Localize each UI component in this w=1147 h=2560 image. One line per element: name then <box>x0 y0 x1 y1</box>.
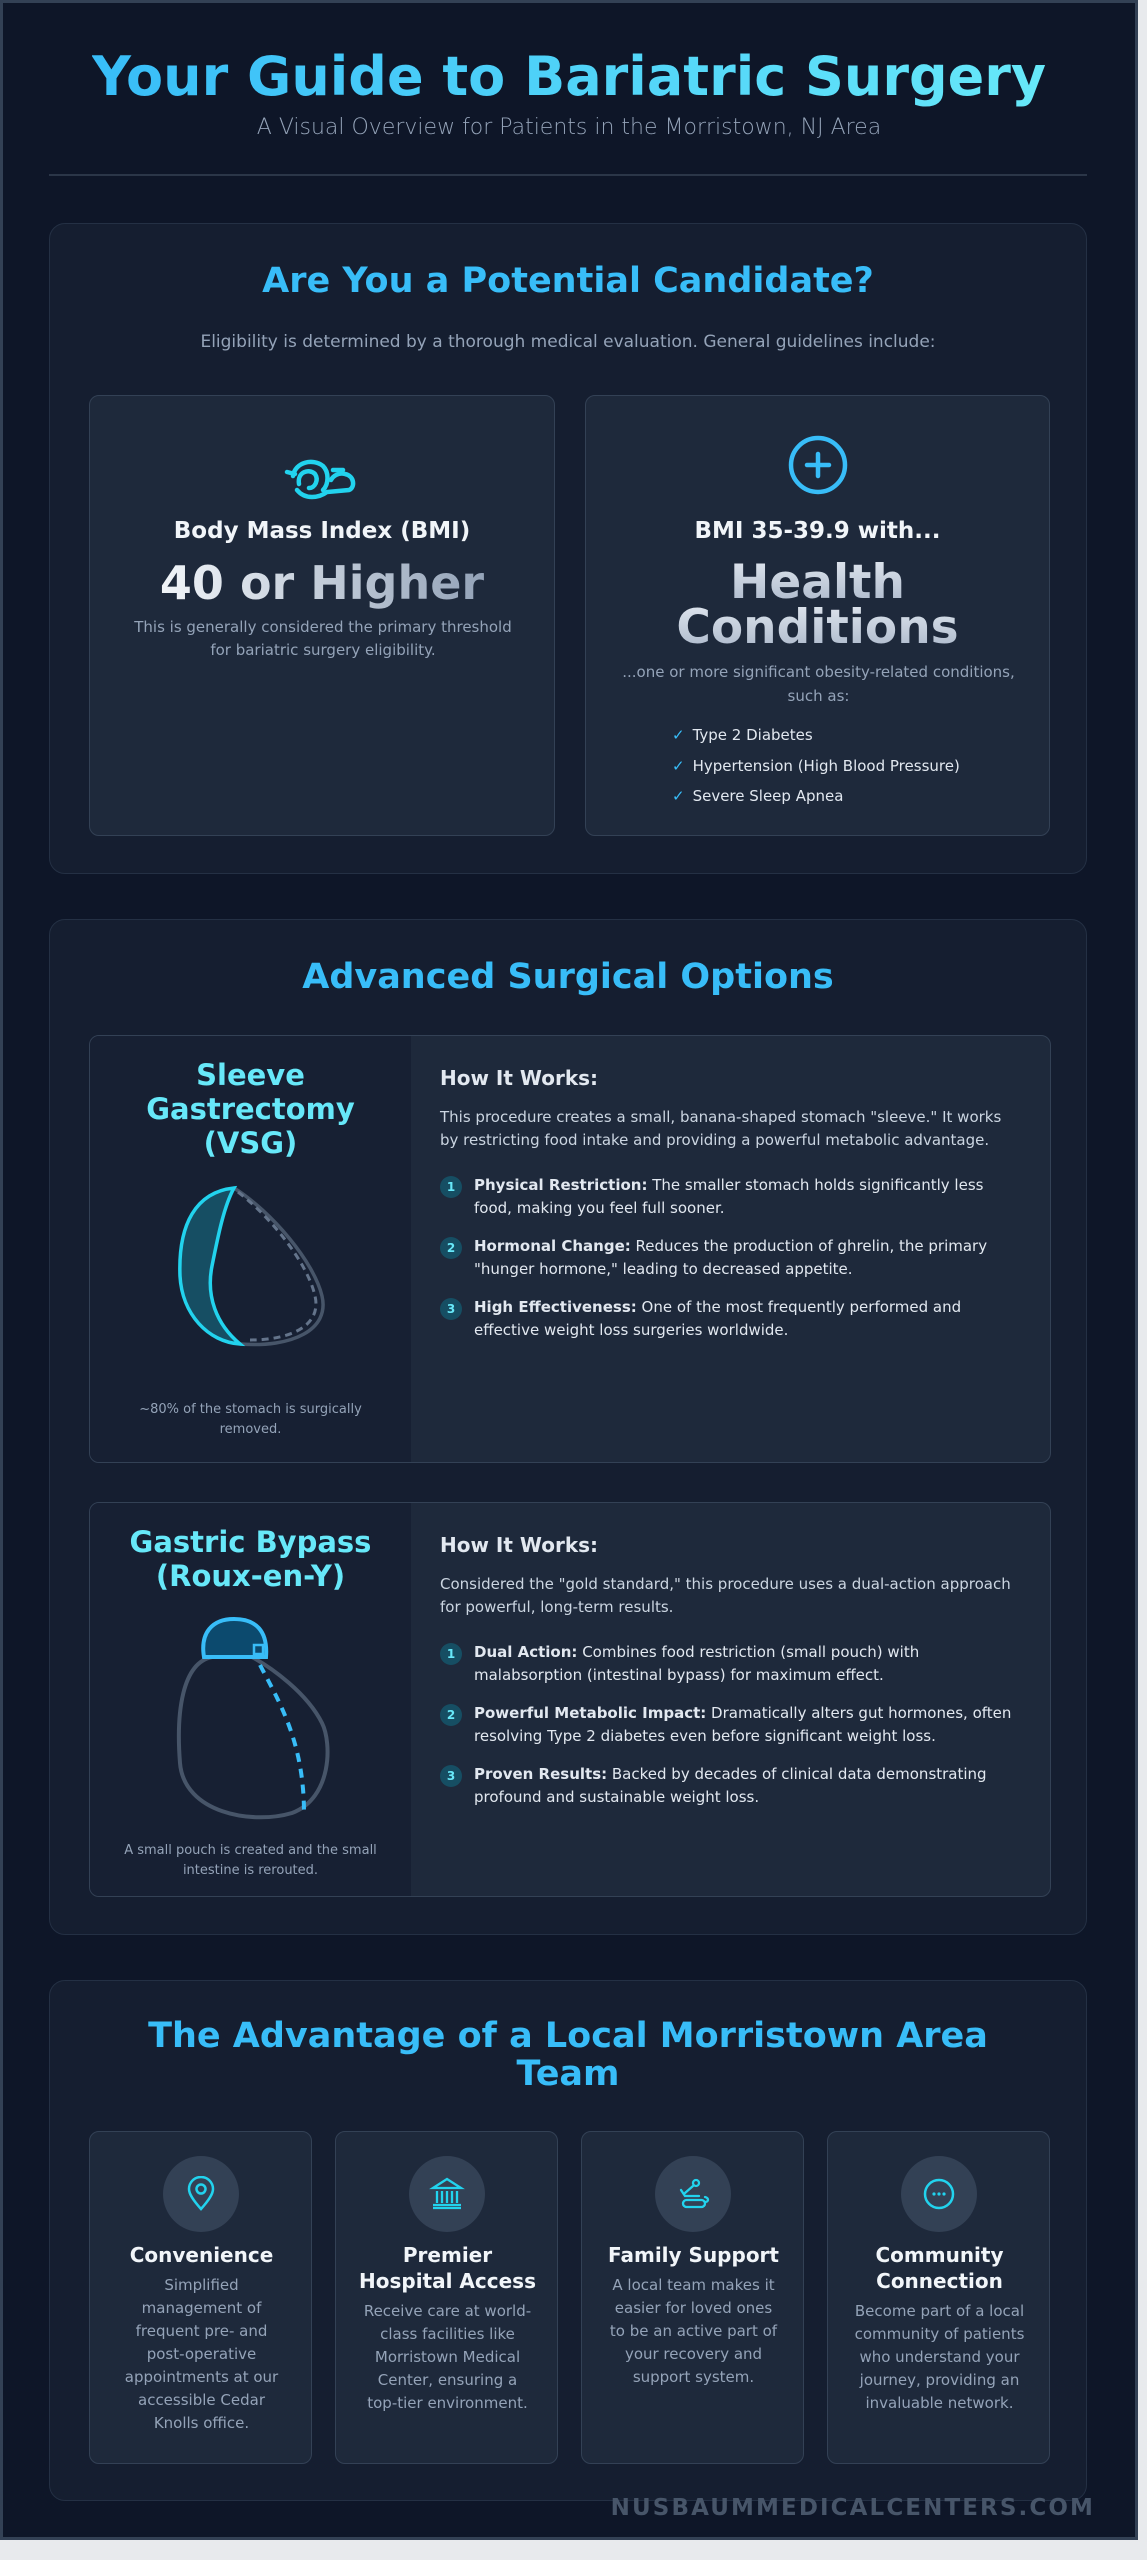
condition list: ✓ Severe Sleep Apnea <box>672 787 843 805</box>
step 2: Hormonal Change: Reduces the production of ghrelin, the primary "hunger hormone," leading to decreased appetite. <box>474 1237 987 1278</box>
description: This is generally considered the primary threshold for bariatric surgery eligibility. <box>134 618 512 659</box>
card text: Simplified management of frequent pre- and post-operative appointments at our accessible Cedar Knolls office. <box>125 2276 278 2432</box>
card: health conditions <box>585 395 1050 836</box>
description: Considered the "gold standard," this procedure uses a dual-action approach for powerful, long-term results. <box>440 1575 1011 1616</box>
step 3: Proven Results: Backed by decades of clinical data demonstrating profound and sustainable weight loss. <box>474 1765 987 1806</box>
subtitle: A Visual Overview for Patients in the Morristown, NJ Area <box>257 115 881 140</box>
card: family support <box>581 2131 804 2464</box>
heading: candidate: Are You a Potential Candidate? <box>262 261 874 301</box>
step 1: Physical Restriction: The smaller stomach holds significantly less food, making you feel full sooner. <box>474 1176 983 1217</box>
step 1: Dual Action: Combines food restriction (small pouch) with malabsorption (intestinal bypass) for maximum effect. <box>474 1643 919 1684</box>
card title: Community <box>875 2243 1004 2267</box>
card: community <box>827 2131 1050 2464</box>
card text: A local team makes it easier for loved ones to be an active part of your recovery and support system. <box>610 2276 777 2386</box>
card title: Family Support <box>608 2243 779 2267</box>
diagram: bypass stomach <box>176 1617 330 1820</box>
condition list <box>672 726 960 805</box>
panel: local advantage <box>49 1980 1087 2501</box>
procedure title <box>146 1058 355 1160</box>
caption: A small pouch is created and the small intestine is rerouted. <box>124 1843 377 1878</box>
big text: Conditions <box>676 600 959 655</box>
big text <box>676 555 959 655</box>
card text: Receive care at world-class facilities like Morristown Medical Center, ensuring a top-tier environment. <box>364 2302 531 2412</box>
procedure title: (Roux-en-Y) <box>156 1559 345 1593</box>
card: sleeve gastrectomy <box>89 1035 1051 1463</box>
card: convenience <box>89 2131 312 2464</box>
card: hospital access <box>335 2131 558 2464</box>
card: BMI 40 <box>89 395 555 836</box>
card title: Convenience <box>130 2243 273 2267</box>
card title <box>875 2243 1004 2293</box>
step 2: Powerful Metabolic Impact: Dramatically alters gut hormones, often resolving Type 2 diabetes even before significant weight loss. <box>474 1704 1011 1745</box>
procedure title: Gastric Bypass <box>130 1525 371 1559</box>
description: This procedure creates a small, banana-shaped stomach "sleeve." It works by restricting food intake and providing a powerful metabolic advantage. <box>440 1108 1001 1149</box>
icon: scale <box>284 460 356 500</box>
card text: Become part of a local community of patients who understand your journey, providing an invaluable network. <box>855 2302 1024 2412</box>
diagram: sleeve stomach <box>178 1186 325 1346</box>
card title: Hospital Access <box>359 2269 536 2293</box>
step 2: 2 <box>447 1708 455 1722</box>
heading: local advantage: The Advantage of a Local Morristown Area Team <box>148 2016 988 2094</box>
icon: location pin <box>163 2156 239 2232</box>
condition list: ✓ Type 2 Diabetes <box>672 726 813 744</box>
big number: 40 or Higher <box>160 556 484 610</box>
description: ...one or more significant obesity-related conditions, such as: <box>622 663 1015 705</box>
procedure title: (VSG) <box>204 1126 297 1160</box>
step 1: 1 <box>447 1180 455 1194</box>
step 3: High Effectiveness: One of the most frequently performed and effective weight loss surgeries worldwide. <box>474 1298 961 1339</box>
panel: candidate <box>49 223 1087 874</box>
heading: surgical options: Advanced Surgical Options <box>302 957 834 997</box>
procedure title: Sleeve <box>196 1058 305 1092</box>
panel: surgical options <box>49 919 1087 1935</box>
procedure title: Gastrectomy <box>146 1092 355 1126</box>
procedure title <box>130 1525 371 1593</box>
step 3: 3 <box>447 1769 455 1783</box>
step 3: 3 <box>447 1302 455 1316</box>
title: Your Guide to Bariatric Surgery <box>92 45 1046 108</box>
card title <box>359 2243 536 2293</box>
icon: helping hand <box>655 2156 731 2232</box>
caption: ~80% of the stomach is surgically removed. <box>139 1402 362 1437</box>
footer: website: NUSBAUMMEDICALCENTERS.COM <box>611 2495 1095 2521</box>
condition list: ✓ Hypertension (High Blood Pressure) <box>672 756 960 774</box>
card: gastric bypass <box>89 1502 1051 1897</box>
icon: hospital building <box>409 2156 485 2232</box>
intro text: Eligibility is determined by a thorough medical evaluation. General guidelines include: <box>200 332 936 352</box>
step 2: 2 <box>447 1241 455 1255</box>
icon: chat circle <box>901 2156 977 2232</box>
card title: Premier <box>403 2243 492 2267</box>
heading: how it works: How It Works: <box>440 1533 598 1557</box>
heading: how it works: How It Works: <box>440 1066 598 1090</box>
big text: Health <box>730 555 905 610</box>
step 1: 1 <box>447 1647 455 1661</box>
icon: plus circle <box>788 436 848 494</box>
label: BMI: Body Mass Index (BMI) <box>174 518 470 544</box>
card title: Connection <box>876 2269 1003 2293</box>
label: BMI 35: BMI 35-39.9 with... <box>694 518 940 544</box>
